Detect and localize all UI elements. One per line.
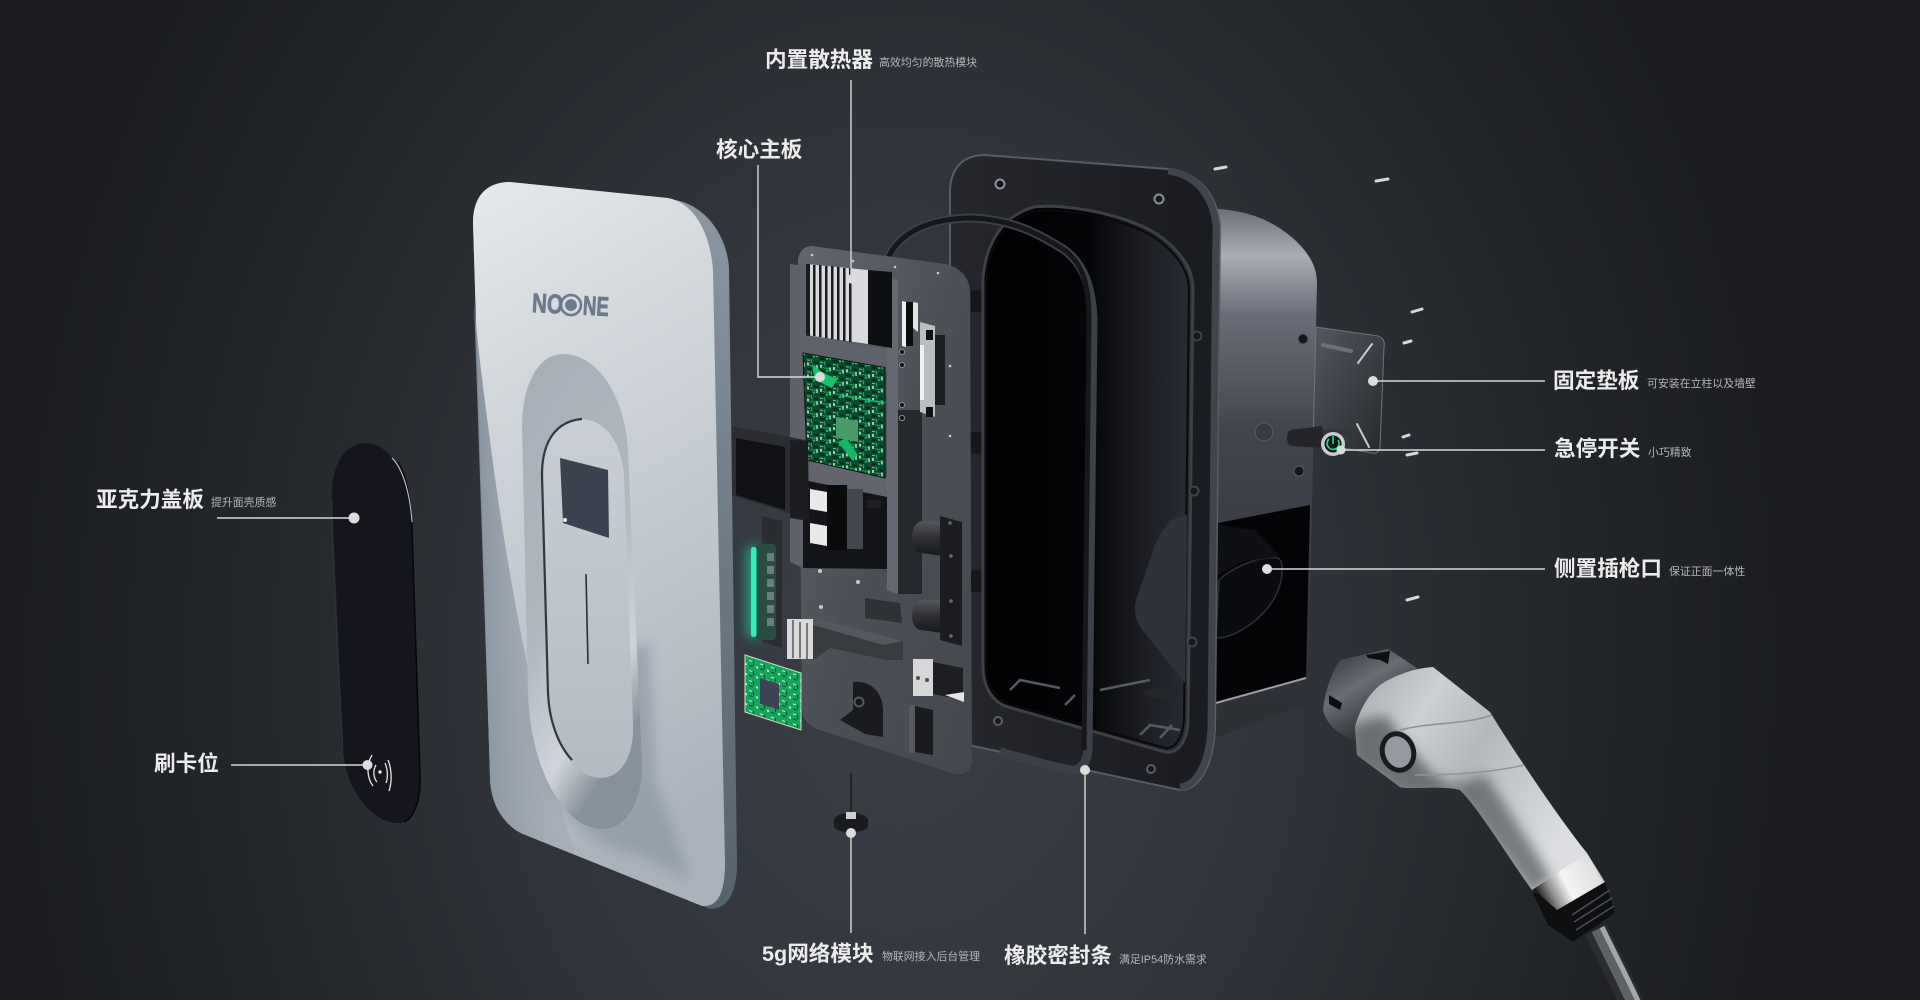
side socket recess xyxy=(1216,505,1310,702)
body screw holes xyxy=(1255,334,1308,476)
panel: small 4G module PCB xyxy=(745,655,801,730)
panel: faceplate xyxy=(473,182,737,909)
recess around the card plate xyxy=(522,354,642,829)
heatsink xyxy=(806,264,892,348)
logo NOONE: NE xyxy=(582,291,610,322)
callout: 侧置插枪口: 保证正面一体性 xyxy=(1669,564,1745,578)
panel: main board xyxy=(787,246,981,774)
callout: 固定垫板 xyxy=(1368,368,1756,393)
callout: 侧置插枪口 xyxy=(1262,556,1745,581)
relay area xyxy=(803,480,887,569)
bottom connector xyxy=(909,705,933,755)
bracket rails xyxy=(790,264,806,568)
callout: 内置散热器 xyxy=(765,47,977,284)
cavity floor ribs xyxy=(1010,680,1180,738)
callout: 固定垫板: 固定垫板 xyxy=(1553,368,1640,393)
callout: 急停开关: 急停开关 xyxy=(1554,436,1641,461)
charging port xyxy=(1216,557,1282,638)
display window xyxy=(560,458,609,538)
panel: LED strip xyxy=(747,516,782,648)
callout: 亚克力盖板: 提升面壳质感 xyxy=(211,495,276,509)
callout: 急停开关: 小巧精致 xyxy=(1648,445,1692,459)
side tabs xyxy=(971,290,981,592)
flange posts xyxy=(994,180,1202,773)
callout: 核心主板 xyxy=(716,137,825,382)
inner card plate xyxy=(542,419,633,778)
terminal block right xyxy=(913,659,964,702)
rubber seal xyxy=(888,218,1093,771)
scattered screws xyxy=(1215,167,1422,600)
callout: 内置散热器: 高效均匀的散热模块 xyxy=(879,55,977,69)
terminal block left xyxy=(787,598,903,660)
callout: 刷卡位: 刷卡位 xyxy=(154,751,219,776)
callout: 橡胶密封条 xyxy=(1004,765,1207,968)
connector nose xyxy=(1323,649,1417,742)
callout: 亚克力盖板: 亚克力盖板 xyxy=(96,487,204,512)
callout: 5g网络模块: 5g网络模块 xyxy=(762,941,874,966)
antenna 5G module xyxy=(834,773,868,832)
callout: 急停开关 xyxy=(1336,436,1692,461)
LED slit xyxy=(586,574,588,664)
logo NOONE: NO xyxy=(531,288,564,320)
chrome collar xyxy=(1532,853,1605,910)
callout: 固定垫板: 可安装在立柱以及墙壁 xyxy=(1647,376,1756,390)
callout: 刷卡位 xyxy=(154,751,372,776)
silver body xyxy=(1355,667,1587,890)
callout: 内置散热器: 内置散热器 xyxy=(765,47,873,72)
callout: 5g网络模块 xyxy=(762,828,980,966)
cable xyxy=(1596,927,1638,1000)
main PCB xyxy=(803,353,885,478)
shadow column xyxy=(898,410,922,594)
mounting plate xyxy=(1313,327,1384,453)
panel: housing front flange xyxy=(950,155,1220,790)
emergency stop switch xyxy=(1287,426,1352,456)
upper right connector xyxy=(902,301,945,417)
icon: NFC waves xyxy=(368,755,391,791)
gun button xyxy=(1374,726,1422,778)
charging gun xyxy=(1323,649,1638,1000)
panel: display module xyxy=(732,426,809,521)
callout: 橡胶密封条: 橡胶密封条 xyxy=(1004,943,1112,968)
cavity xyxy=(983,206,1193,752)
callout: 亚克力盖板 xyxy=(96,487,360,524)
panel: housing body xyxy=(1205,208,1317,738)
callout: 核心主板: 核心主板 xyxy=(716,137,803,162)
rail screws xyxy=(899,349,905,421)
bracket bands xyxy=(803,335,887,372)
body shading xyxy=(1350,715,1552,895)
callout: 5g网络模块: 物联网接入后台管理 xyxy=(882,949,980,963)
logo NOONE xyxy=(531,288,610,322)
acrylic cover panel xyxy=(332,443,420,823)
callout: 侧置插枪口: 侧置插枪口 xyxy=(1554,556,1662,581)
current transformer xyxy=(840,682,883,737)
small board screws xyxy=(811,254,951,609)
hood highlight xyxy=(1135,515,1187,683)
right bracket with capacitors xyxy=(912,516,962,646)
callout: 橡胶密封条: 满足IP54防水需求 xyxy=(1119,952,1207,966)
threaded strain relief xyxy=(1533,883,1615,942)
